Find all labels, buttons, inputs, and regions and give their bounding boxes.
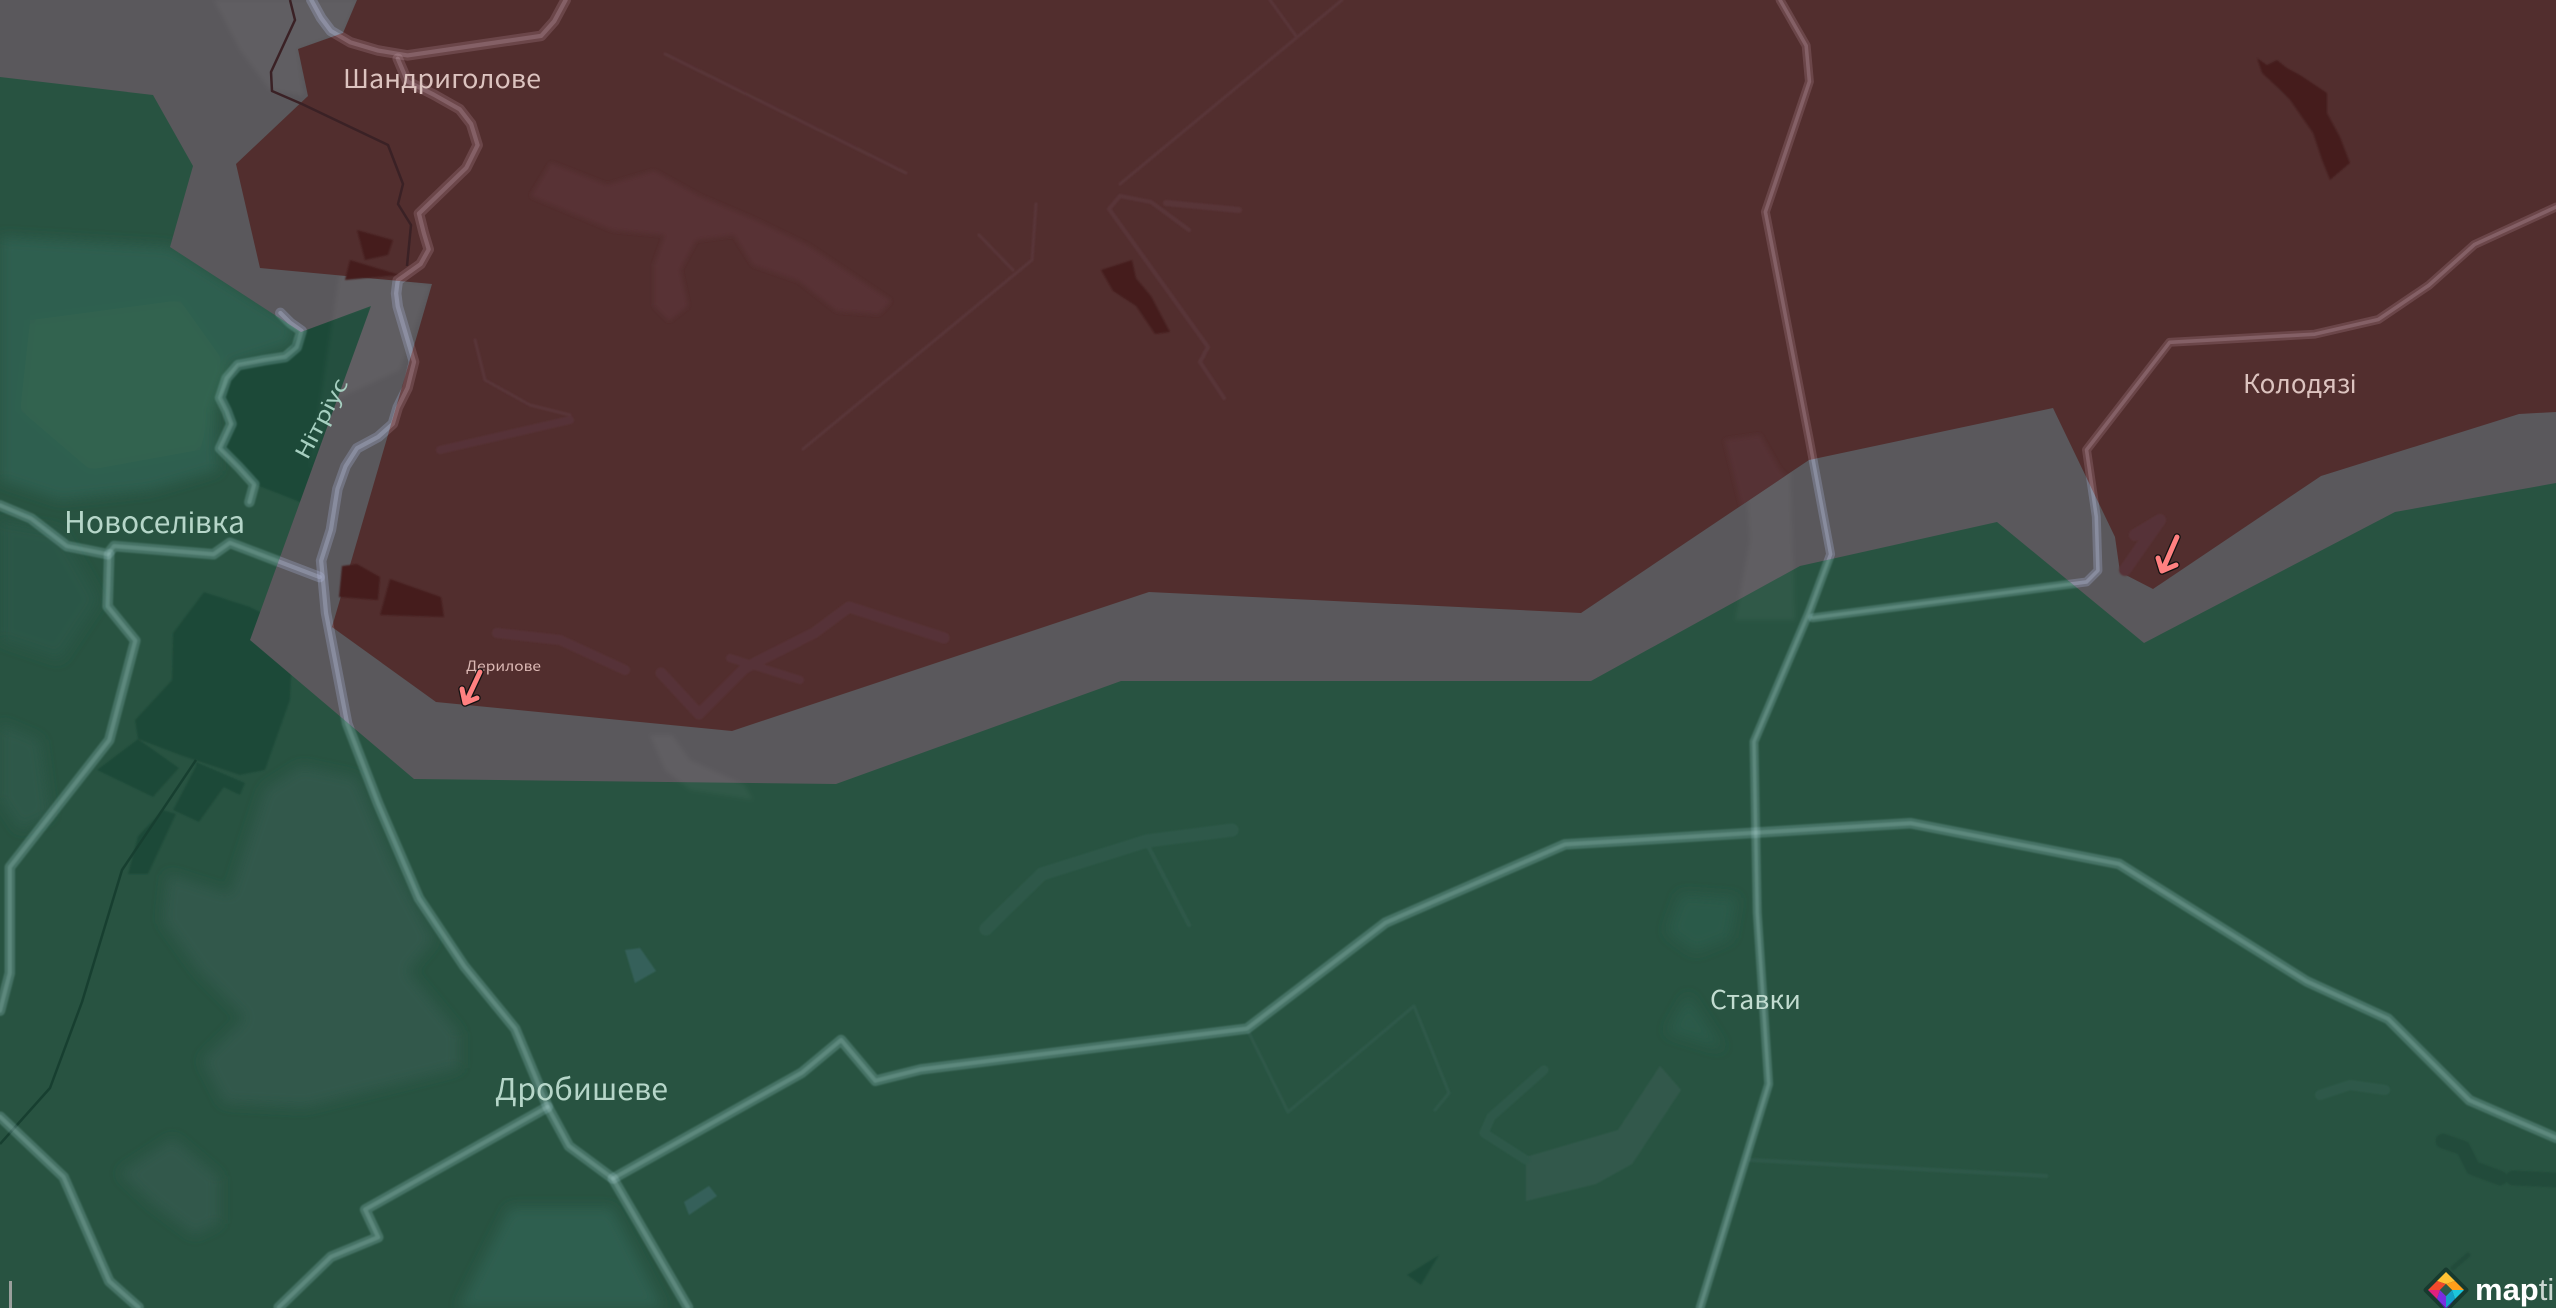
- dark green forest patches: [97, 306, 1439, 1285]
- red faint tracks: [440, 0, 2160, 714]
- label: Нітріус: Нітріус: [287, 372, 355, 464]
- arrow: Дерилове advance: [462, 672, 480, 703]
- logo mark: [2426, 1270, 2466, 1308]
- dark green ponds lower right: [2443, 1141, 2556, 1268]
- label: Дробишеве: Дробишеве: [495, 1065, 668, 1109]
- panel: grey contested zone: [0, 0, 2556, 784]
- label: Дерилове: Дерилове: [466, 656, 541, 676]
- green light settlement patches: [0, 237, 1737, 1308]
- label: Колодязі: Колодязі: [2243, 364, 2356, 401]
- label: Ставки: Ставки: [1710, 980, 1801, 1017]
- river in north: [271, 0, 411, 266]
- arrow: Колодязі advance: [2158, 537, 2177, 571]
- roads in red territory: [332, 0, 2556, 628]
- label: Шандриголове: Шандриголове: [343, 59, 541, 96]
- green small patches: [625, 948, 1681, 1215]
- roads in grey zone: [275, 0, 2102, 729]
- scale bar tick: [9, 1281, 12, 1308]
- grey zone faint features: [214, 0, 1795, 800]
- red dark patches: [339, 58, 2350, 617]
- label: Новоселівка: Новоселівка: [64, 498, 245, 542]
- logo: maptiler: [2426, 1270, 2556, 1308]
- red faint terrain patches: [1748, 477, 2173, 572]
- green faint field tracks: [986, 830, 2385, 1176]
- panel: red occupied territory: [236, 0, 2556, 731]
- river in green area: [0, 760, 196, 1144]
